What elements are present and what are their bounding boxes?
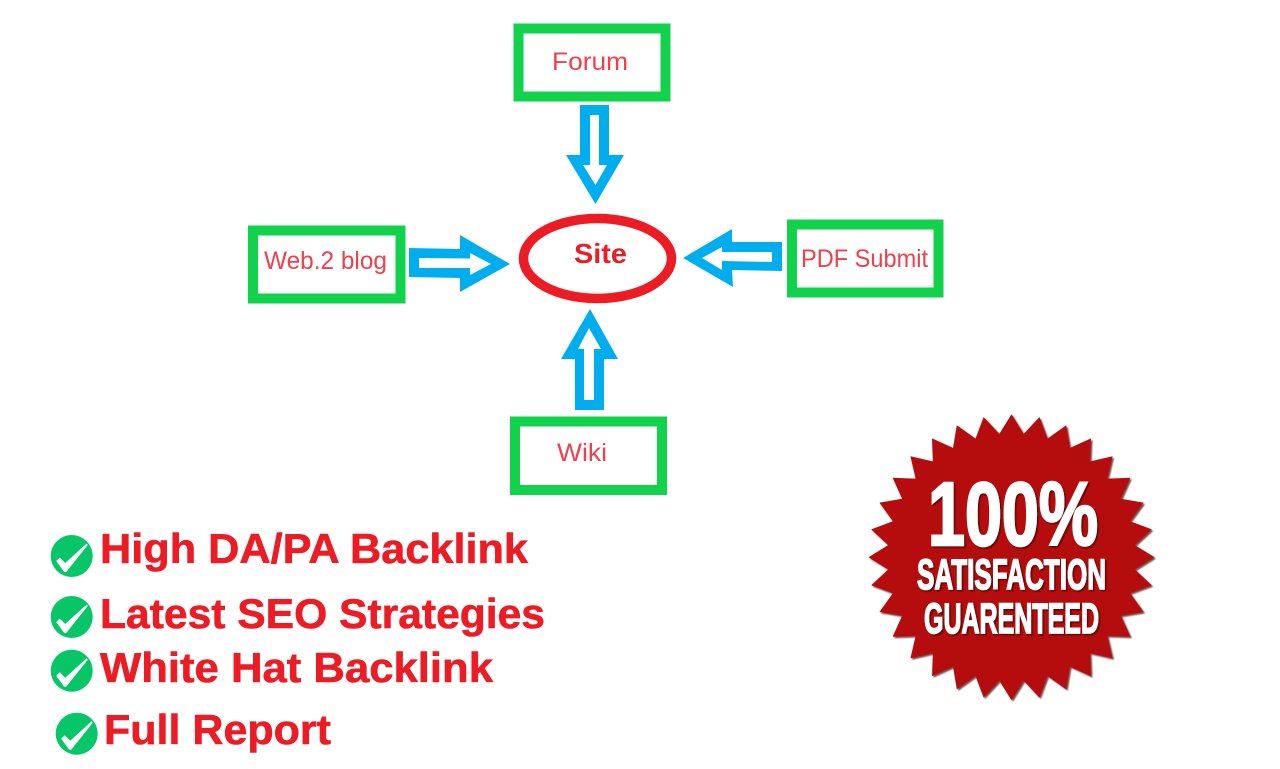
feature: Latest SEO Strategies: Latest SEO Strategies: [100, 590, 545, 637]
arrow: Web.2 blog to Site: [409, 235, 510, 292]
box: Web.2 blog: [253, 230, 400, 298]
feature: Full Report: Full Report: [104, 706, 331, 753]
box: Web.2 blog: Web.2 blog: [264, 247, 387, 275]
icon: check mark: [51, 535, 93, 577]
icon: check mark: [56, 713, 98, 755]
box: PDF Submit: [792, 224, 938, 292]
node: Site: [524, 218, 672, 298]
box: Wiki: [515, 422, 662, 490]
badge: 100% satisfaction guarenteed: [868, 414, 1154, 700]
diagram: backlink flow: [253, 28, 938, 490]
feature: High DA/PA Backlink: High DA/PA Backlink: [100, 525, 529, 572]
box: PDF Submit: PDF Submit: [801, 245, 928, 273]
box: Forum: Forum: [552, 48, 628, 76]
box: Forum: [518, 28, 666, 96]
badge text: GUARENTEED: GUARENTEED: [924, 595, 1099, 643]
arrow: Forum to Site: [566, 105, 624, 204]
icon: check mark: [51, 650, 93, 692]
arrow: Wiki to Site: [561, 309, 618, 410]
arrow: PDF Submit to Site: [683, 229, 782, 287]
badge text: SATISFACTION: SATISFACTION: [917, 551, 1106, 599]
icon: check mark: [51, 596, 93, 638]
feature list: [51, 525, 545, 755]
badge text: 100%: 100%: [928, 465, 1098, 565]
feature: White Hat Backlink: White Hat Backlink: [100, 644, 494, 691]
box: Wiki: Wiki: [557, 439, 607, 467]
node: Site: Site: [574, 238, 627, 269]
badge: starburst seal: [868, 414, 1154, 700]
